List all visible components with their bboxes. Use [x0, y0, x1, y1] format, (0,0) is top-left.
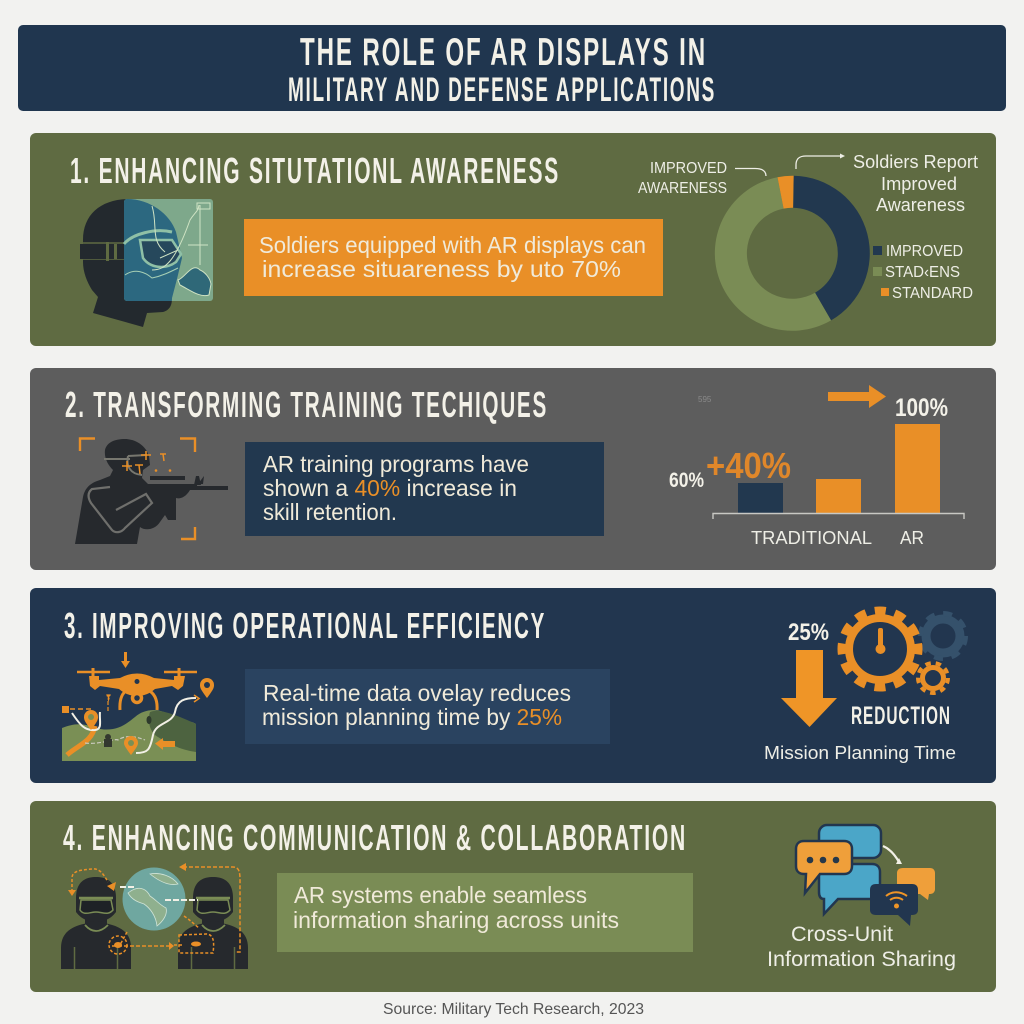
icon: drone over terrain: [62, 652, 214, 761]
label: reduction: Mission Planning Time: [764, 742, 956, 763]
bar chart: 100%: [895, 394, 948, 422]
callout: 25 percent reduction: mission planning time by 25%: [262, 704, 562, 730]
donut legend: STAD‹ENS: [885, 264, 960, 281]
bar chart: 60%: [669, 469, 704, 492]
panel: communication and collaboration: [30, 801, 996, 992]
icon: head with AR visor: [80, 199, 213, 327]
label: cross-unit sharing: Information Sharing: [767, 948, 956, 971]
callout: information sharing: AR systems enable seamless: [294, 882, 587, 908]
panel: operational efficiency: [30, 588, 996, 783]
callout: 40 percent retention: shown a 40% increase in: [263, 475, 517, 501]
bar chart: [669, 385, 964, 548]
icon: soldier with rifle: [75, 438, 228, 544]
donut label left: AWARENESS: [638, 180, 727, 197]
panel: situational awareness: [30, 133, 996, 346]
bar chart: TRADITIONAL: [751, 527, 872, 548]
label: reduction: [764, 702, 956, 763]
callout: 40 percent retention: skill retention.: [263, 499, 397, 525]
label: reduction: REDUCTION: [851, 702, 951, 730]
label: cross-unit sharing: [767, 923, 956, 971]
icon: arrow and gears: 25%: [788, 619, 829, 646]
donut chart: [715, 176, 870, 331]
donut label left: [638, 160, 766, 197]
panel: training techniques: [30, 368, 996, 570]
heading: section 3: 3. IMPROVING OPERATIONAL EFFICIENCY: [64, 605, 546, 646]
callout: 70 percent: [244, 219, 663, 296]
soldier right: [178, 877, 248, 969]
callout: 40 percent retention: [245, 442, 604, 536]
callout: information sharing: [277, 873, 693, 952]
icon: connected soldiers and globe: [61, 863, 248, 969]
callout: information sharing: information sharing across units: [293, 907, 619, 933]
source line: Source: Military Tech Research, 2023: [383, 1001, 644, 1018]
bar chart: +40%: [706, 445, 791, 486]
icon: chat bubbles: [796, 825, 935, 926]
icon: arrow and gears: [781, 605, 966, 727]
donut label right: Awareness: [876, 194, 965, 215]
callout: 25 percent reduction: Real-time data ovelay reduces: [263, 680, 571, 706]
donut label right: Improved: [881, 173, 957, 194]
donut label right: [796, 151, 978, 215]
bar chart: AR: [900, 527, 924, 548]
donut legend: STANDARD: [892, 285, 973, 302]
soldier left: [61, 877, 131, 969]
title banner: [18, 25, 1006, 111]
callout: 70 percent: Soldiers equipped with AR displays can: [259, 232, 646, 258]
callout: 40 percent retention: AR training programs have: [263, 451, 529, 477]
heading: section 2: 2. TRANSFORMING TRAINING TECHIQUES: [65, 384, 548, 425]
donut label right: Soldiers Report: [853, 151, 978, 172]
bar chart: 595: [698, 395, 712, 404]
callout: 70 percent: increase situareness by uto 70%: [262, 256, 621, 282]
donut legend: IMPROVED: [886, 243, 963, 260]
donut label left: IMPROVED: [650, 160, 727, 177]
callout: 25 percent reduction: [245, 669, 610, 744]
heading: section 1: 1. ENHANCING SITUTATIONL AWARENESS: [70, 150, 560, 191]
label: cross-unit sharing: Cross-Unit: [791, 923, 893, 946]
donut legend: [873, 243, 973, 302]
title banner: THE ROLE OF AR DISPLAYS IN: [300, 31, 707, 74]
